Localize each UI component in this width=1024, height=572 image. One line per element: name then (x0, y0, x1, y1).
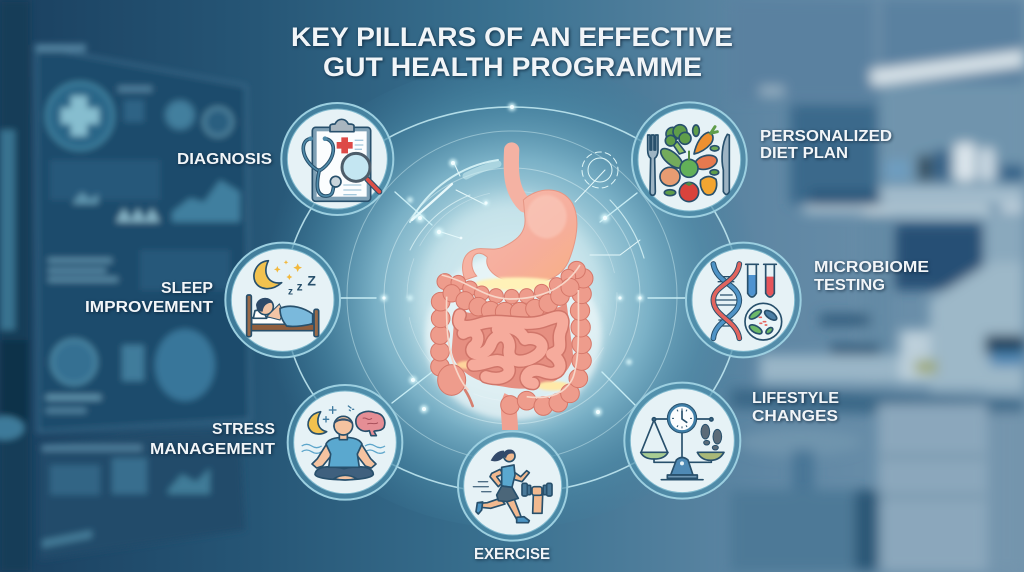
ring (632, 102, 747, 217)
label: sleep improvement: IMPROVEMENT (85, 299, 214, 316)
ring (288, 385, 402, 500)
petri dish (745, 303, 782, 340)
title (291, 22, 733, 82)
pillar: stress management icon (288, 385, 402, 500)
dna helix (713, 264, 739, 338)
label: stress management: STRESS (212, 421, 275, 438)
waves right (365, 444, 385, 453)
fork (648, 135, 658, 195)
potato (660, 167, 680, 186)
clipboard (312, 127, 371, 201)
label: lifestyle changes (752, 390, 839, 425)
disk (464, 437, 562, 535)
footprints (701, 424, 722, 450)
ring (686, 243, 801, 357)
runner (476, 450, 529, 523)
carrot (694, 132, 713, 154)
pillar: lifestyle changes icon (624, 383, 740, 499)
disk (630, 389, 734, 493)
label: personalized diet plan: PERSONALIZED (760, 128, 892, 145)
pillar: microbiome testing icon (686, 243, 801, 357)
glow between stomach and colon (475, 277, 558, 291)
label: lifestyle changes: LIFESTYLE (752, 390, 839, 407)
meditating person (312, 416, 376, 480)
waves left (302, 444, 322, 453)
sparkles (323, 406, 354, 422)
glowing network nodes (380, 103, 644, 491)
apple (680, 159, 698, 177)
left monitor with dashboard (0, 0, 250, 572)
appendix (465, 390, 473, 406)
pillar: personalized diet plan icon (632, 102, 747, 217)
scale base (671, 457, 693, 475)
label: microbiome testing (814, 259, 929, 294)
ring (225, 243, 340, 357)
disk (294, 391, 396, 494)
sleeping letters: z (297, 280, 303, 294)
moon (308, 412, 327, 434)
label: personalized diet plan (760, 128, 892, 162)
dumbbell and arm (522, 483, 552, 513)
label: personalized diet plan: DIET PLAN (760, 145, 848, 162)
disk (287, 109, 387, 209)
bacteria (748, 308, 778, 336)
label: diagnosis: DIAGNOSIS (177, 151, 272, 168)
title: GUT HEALTH PROGRAMME (323, 52, 702, 82)
dna rungs (715, 277, 737, 326)
small intestine mass (452, 303, 573, 389)
knife (722, 134, 729, 194)
colon bands (442, 265, 580, 397)
label: stress management: MANAGEMENT (150, 441, 276, 458)
central glow disc (250, 64, 774, 528)
illustration: stomach and intestines (425, 150, 602, 430)
tomato (679, 182, 699, 202)
test tube blue (746, 264, 758, 297)
sleeping letters: Z (307, 272, 316, 288)
esophagus (511, 150, 525, 205)
sleeper (253, 310, 267, 318)
salmon (693, 153, 719, 172)
glow behind organs (425, 253, 602, 420)
label: microbiome testing: MICROBIOME (814, 259, 929, 276)
rectum (509, 397, 512, 430)
right laboratory shelves and benches (730, 0, 1024, 572)
right pan (697, 452, 724, 460)
disk (638, 108, 741, 211)
sleeping letters (288, 272, 316, 298)
stethoscope (303, 139, 335, 196)
label: lifestyle changes: CHANGES (752, 408, 838, 425)
moon (254, 261, 282, 289)
cucumber (658, 145, 686, 171)
test tube red (764, 264, 776, 297)
label: sleep improvement: SLEEP (161, 280, 213, 297)
pillar: sleep improvement icon (225, 243, 340, 357)
ring (281, 103, 393, 215)
left pan (641, 452, 668, 459)
speed lines (473, 482, 491, 492)
blanket (280, 306, 313, 326)
disk (692, 249, 795, 351)
disk (231, 249, 334, 351)
label: sleep improvement (85, 280, 214, 316)
label: exercise: EXERCISE (474, 546, 550, 563)
broccoli (673, 142, 685, 154)
label: microbiome testing: TESTING (814, 277, 885, 294)
magnifier (367, 179, 379, 192)
ring (458, 431, 567, 541)
ring (624, 383, 740, 499)
pillar: exercise icon (458, 431, 567, 541)
scale frame (641, 419, 711, 463)
title: KEY PILLARS OF AN EFFECTIVE (291, 22, 733, 52)
leaves (693, 125, 699, 136)
pepper (700, 176, 717, 195)
small intestine loops (459, 315, 563, 383)
pillar: diagnosis icon (281, 103, 393, 215)
label: stress management (150, 421, 276, 458)
clock (669, 405, 695, 432)
stomach (463, 190, 577, 283)
stars (274, 260, 302, 280)
bed (247, 295, 251, 337)
brain (356, 411, 385, 436)
connection ring and spokes (284, 107, 740, 493)
colon (431, 261, 593, 415)
sleeping letters: z (288, 287, 293, 298)
